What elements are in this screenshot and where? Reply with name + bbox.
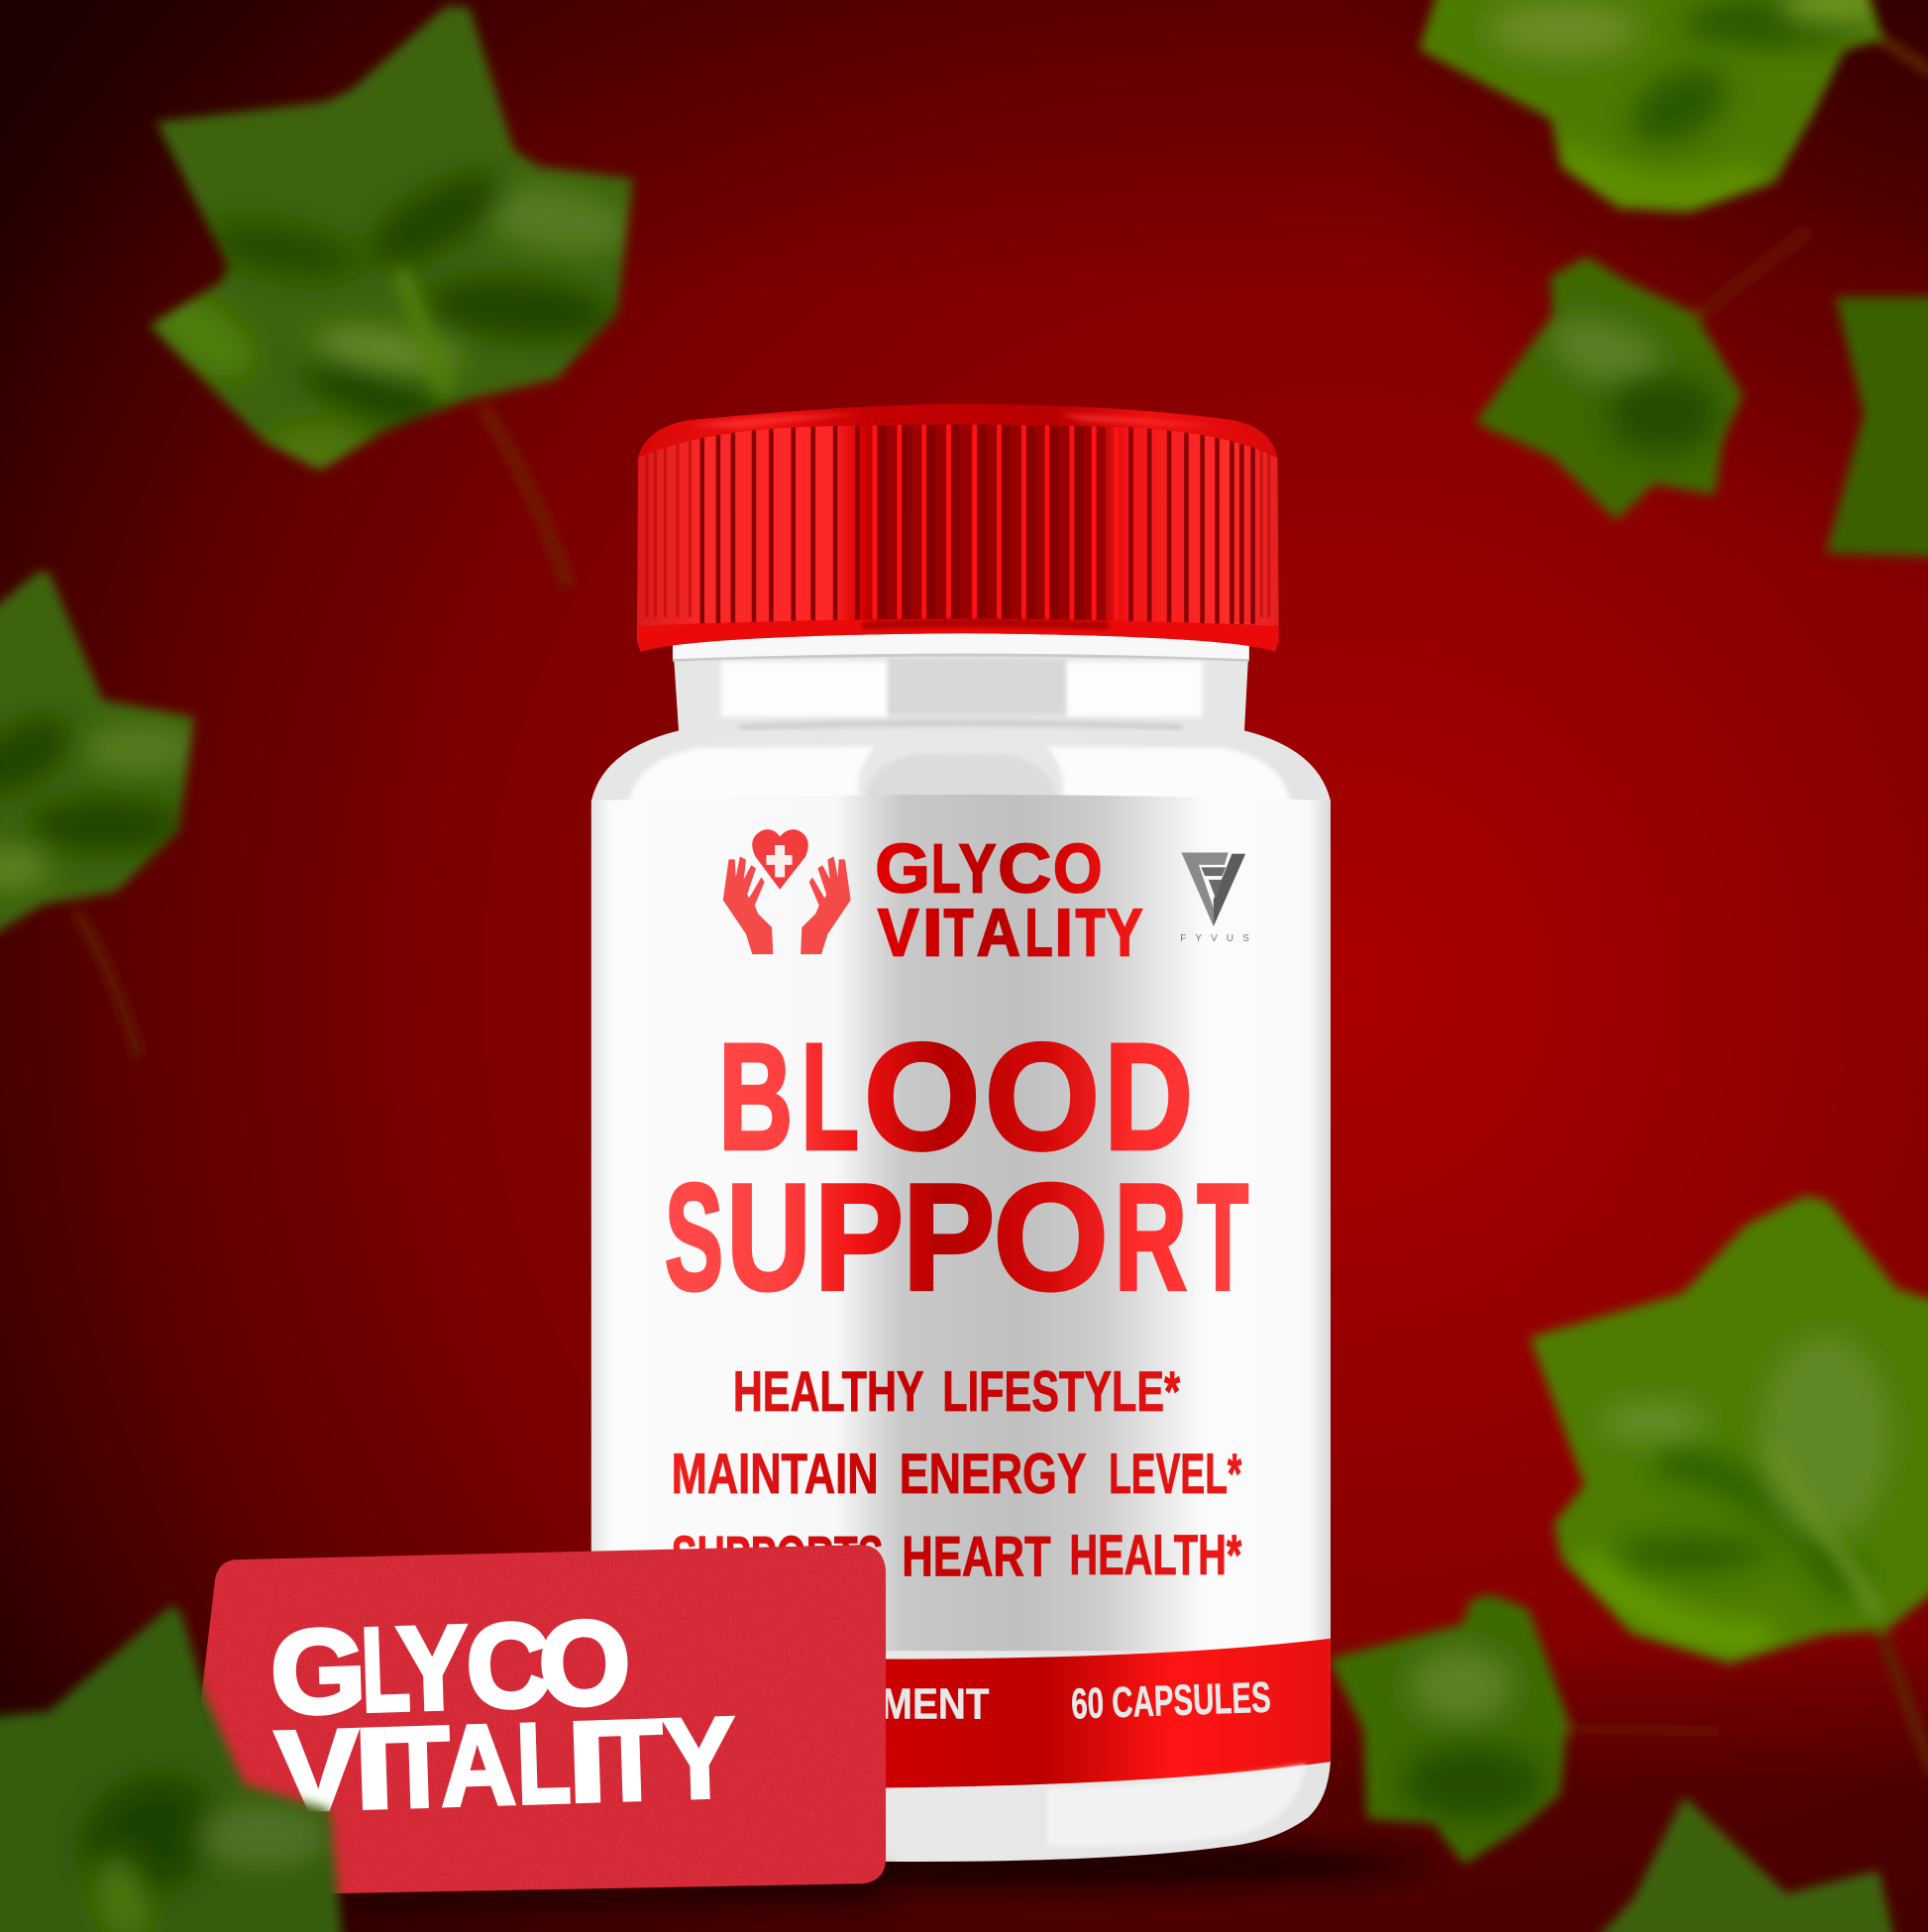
heading: BLOOD SUPPORT: T (1197, 1153, 1248, 1322)
benefit list: HEALTHY (733, 1360, 924, 1424)
heart with cross (752, 829, 808, 890)
bottle shadow (665, 1846, 1429, 1884)
brand: GLYCO VITALITY: A (977, 896, 1020, 970)
card wordmark (268, 1596, 737, 1836)
heading: BLOOD SUPPORT: O (985, 1014, 1100, 1182)
logo: FYVUS (1180, 852, 1249, 944)
benefit list (672, 1360, 1242, 1588)
band text: SUPPLEMENT (727, 1681, 990, 1729)
card wordmark: T (384, 1701, 452, 1832)
benefit list: LEVEL* (1109, 1443, 1242, 1506)
shoulder highlights (628, 747, 1291, 806)
brand: GLYCO VITALITY: L (931, 829, 961, 907)
leaf: bottom right (1595, 1796, 1894, 1932)
icon: heart held by two hands (723, 829, 850, 953)
brand: GLYCO VITALITY (875, 829, 1142, 970)
benefit list: SUPPORTS (672, 1525, 884, 1588)
leaf: top right (1423, 0, 1928, 209)
heading: BLOOD SUPPORT: D (1105, 1014, 1193, 1182)
bottle (591, 400, 1429, 1884)
brand: GLYCO VITALITY: L (1025, 896, 1053, 970)
card wordmark: Y (395, 1602, 470, 1736)
left hand (723, 857, 773, 953)
leaf: large lower right (1534, 1199, 1928, 1774)
card shadow (345, 1873, 887, 1916)
red band (690, 1639, 1331, 1788)
heading: BLOOD SUPPORT (665, 1014, 1248, 1322)
brand: GLYCO VITALITY: T (944, 896, 973, 970)
brand: GLYCO VITALITY: O (1053, 829, 1103, 907)
band text: 60 CAPSULES (1070, 1674, 1271, 1729)
heading: BLOOD SUPPORT: P (814, 1153, 904, 1322)
brand: GLYCO VITALITY: I (1054, 896, 1073, 970)
benefit list: HEART (902, 1525, 1051, 1588)
card wordmark: G (268, 1605, 368, 1740)
bottle neck (673, 631, 1249, 733)
card wordmark: C (465, 1599, 552, 1733)
bottle base highlight (1047, 1765, 1306, 1846)
heading: BLOOD SUPPORT: P (903, 1153, 995, 1322)
benefit list: HEALTH* (1069, 1524, 1242, 1587)
brand: GLYCO VITALITY: Y (1107, 896, 1142, 970)
heading: BLOOD SUPPORT: R (1115, 1153, 1187, 1322)
card wordmark: T (596, 1695, 665, 1826)
label (591, 795, 1331, 1651)
card wordmark: O (537, 1596, 632, 1731)
card texture (201, 1545, 886, 1893)
band text (727, 1674, 1271, 1729)
benefit list: LIFESTYLE* (942, 1360, 1181, 1424)
card wordmark: I (352, 1703, 395, 1833)
leaf: bottom left foreground (0, 1605, 343, 1932)
leaf: upper right (1479, 231, 1808, 516)
right hand (802, 857, 850, 953)
card wordmark: L (514, 1698, 573, 1828)
leaf: lower middle right (1333, 1598, 1719, 1861)
brand: GLYCO VITALITY: I (922, 896, 943, 970)
logo: FYVUS: FYVUS (1180, 933, 1249, 944)
card wordmark: A (438, 1699, 517, 1831)
card wordmark: I (565, 1696, 608, 1827)
brand: GLYCO VITALITY: T (1076, 896, 1105, 970)
brand: GLYCO VITALITY: C (998, 829, 1051, 907)
heading: BLOOD SUPPORT: O (864, 1014, 981, 1182)
leaf: top left (140, 6, 636, 588)
heading: BLOOD SUPPORT: U (727, 1153, 810, 1322)
leaf: left edge (0, 572, 198, 1057)
brand: GLYCO VITALITY: V (878, 896, 918, 970)
heading: BLOOD SUPPORT: B (718, 1014, 793, 1182)
card wordmark: Y (661, 1692, 737, 1824)
card wordmark: V (273, 1704, 362, 1836)
benefit list: MAINTAIN (672, 1443, 879, 1506)
benefit list: ENERGY (900, 1443, 1087, 1506)
brand: GLYCO VITALITY: Y (959, 829, 996, 907)
leaf: right edge (1826, 297, 1928, 557)
bottle body (591, 730, 1331, 1862)
heading: BLOOD SUPPORT: L (801, 1014, 859, 1182)
cap (628, 400, 1294, 659)
card wordmark: L (360, 1603, 412, 1737)
heading: BLOOD SUPPORT: O (993, 1153, 1109, 1322)
red name card (201, 1545, 886, 1893)
heading: BLOOD SUPPORT: S (665, 1153, 723, 1322)
brand: GLYCO VITALITY: G (875, 829, 930, 907)
